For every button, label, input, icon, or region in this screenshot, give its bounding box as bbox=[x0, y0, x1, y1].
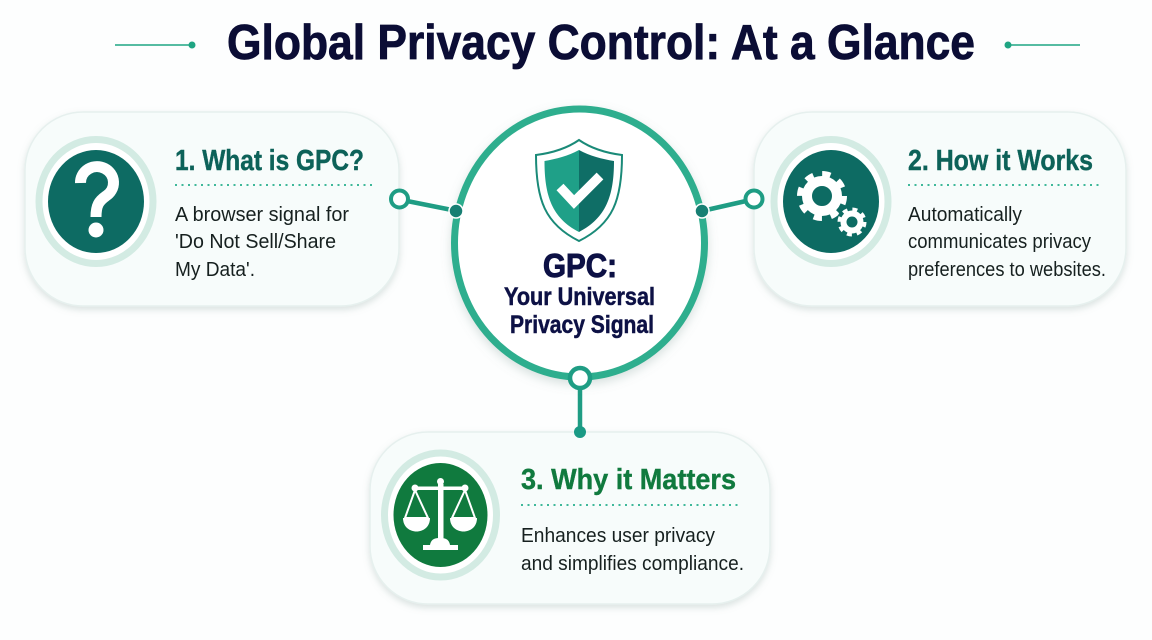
description bbox=[175, 204, 349, 281]
title ornament left bbox=[115, 42, 196, 48]
description: My Data'. bbox=[175, 259, 255, 281]
description bbox=[908, 204, 1106, 281]
connector nodes bbox=[449, 204, 709, 388]
center label: GPC: bbox=[543, 247, 617, 284]
center label: Your Universal bbox=[504, 283, 655, 311]
connector: left bbox=[391, 190, 457, 211]
description: A browser signal for bbox=[175, 204, 349, 226]
panel: 2. How it Works bbox=[754, 112, 1126, 306]
title ornament right bbox=[1004, 42, 1080, 48]
central circle bbox=[449, 109, 709, 388]
description: Automatically bbox=[908, 204, 1022, 226]
panel: 3. Why it Matters bbox=[370, 432, 770, 604]
heading: 1. What is GPC? bbox=[175, 145, 364, 177]
icon: gears bbox=[774, 140, 888, 264]
connector: right bbox=[702, 190, 762, 211]
description: and simplifies compliance. bbox=[521, 553, 744, 575]
description: preferences to websites. bbox=[908, 259, 1106, 281]
panel: 1. What is GPC bbox=[25, 112, 399, 306]
center label bbox=[504, 247, 655, 339]
icon: shield with check bbox=[536, 140, 622, 241]
center label: Privacy Signal bbox=[510, 311, 654, 339]
heading: 3. Why it Matters bbox=[521, 464, 736, 496]
title: Global Privacy Control: At a Glance bbox=[227, 16, 975, 70]
icon: scales bbox=[384, 453, 496, 577]
icon: question mark bbox=[39, 140, 153, 264]
connector: bottom bbox=[574, 388, 586, 438]
heading: 2. How it Works bbox=[908, 145, 1093, 177]
description: Enhances user privacy bbox=[521, 525, 715, 547]
description: 'Do Not Sell/Share bbox=[175, 231, 336, 253]
description: communicates privacy bbox=[908, 231, 1091, 253]
description bbox=[521, 525, 744, 575]
